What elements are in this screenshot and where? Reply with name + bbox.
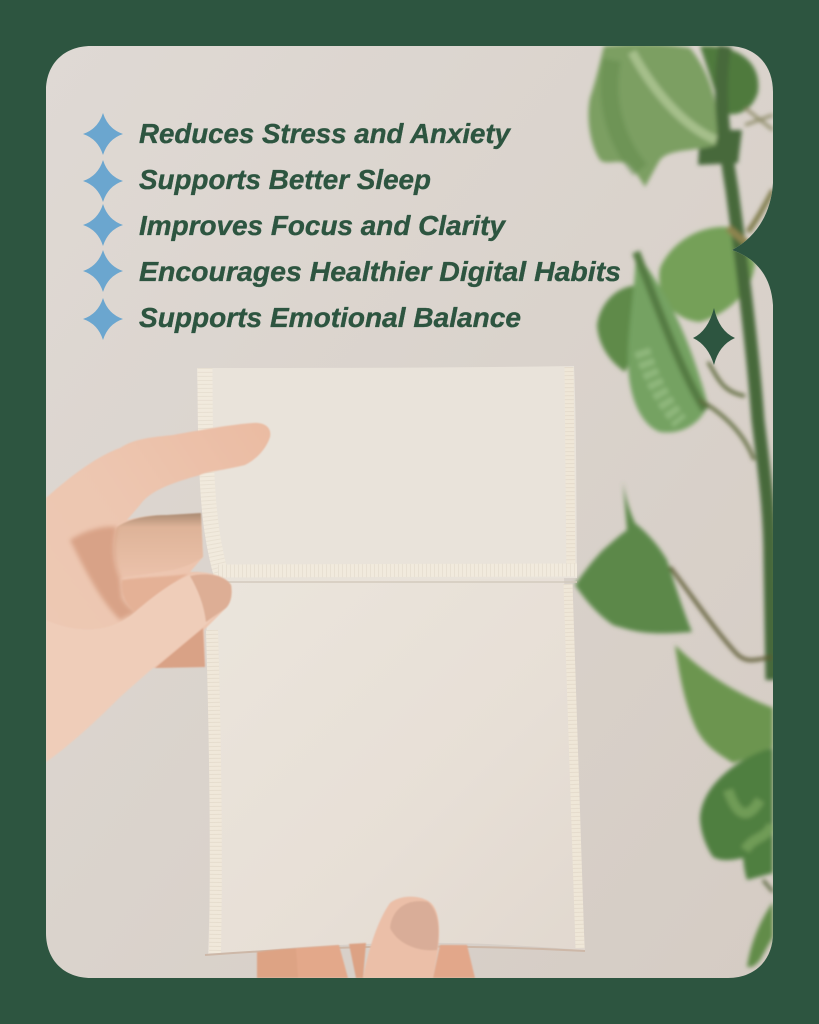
benefit 1: Reduces Stress and Anxiety [139,118,511,149]
benefits list [83,113,621,340]
pouch stitched seams [205,367,580,953]
benefit 3 [83,204,506,246]
ring finger shadow [155,628,205,668]
plant: vine and leaves [575,44,773,967]
benefit 2: Supports Better Sleep [139,164,431,195]
palm shadow [70,527,140,620]
benefit 4: Encourages Healthier Digital Habits [139,256,621,287]
thumb [120,576,206,667]
hand holding pouch from the left [46,423,270,762]
benefit 2 [83,160,431,202]
thumb tip [190,574,232,622]
fingers at the bottom [257,897,475,978]
ring finger behind the thumb [122,574,188,612]
benefit 1 [83,113,511,155]
middle finger [114,513,203,578]
pouch lower body [205,578,585,955]
benefit 5 [83,298,521,340]
benefit 5: Supports Emotional Balance [139,302,521,333]
benefit 3: Improves Focus and Clarity [139,210,506,241]
pouch flap [197,366,577,581]
pouch [197,366,585,955]
decorative dark star [693,308,735,365]
benefit 4 [83,250,621,292]
